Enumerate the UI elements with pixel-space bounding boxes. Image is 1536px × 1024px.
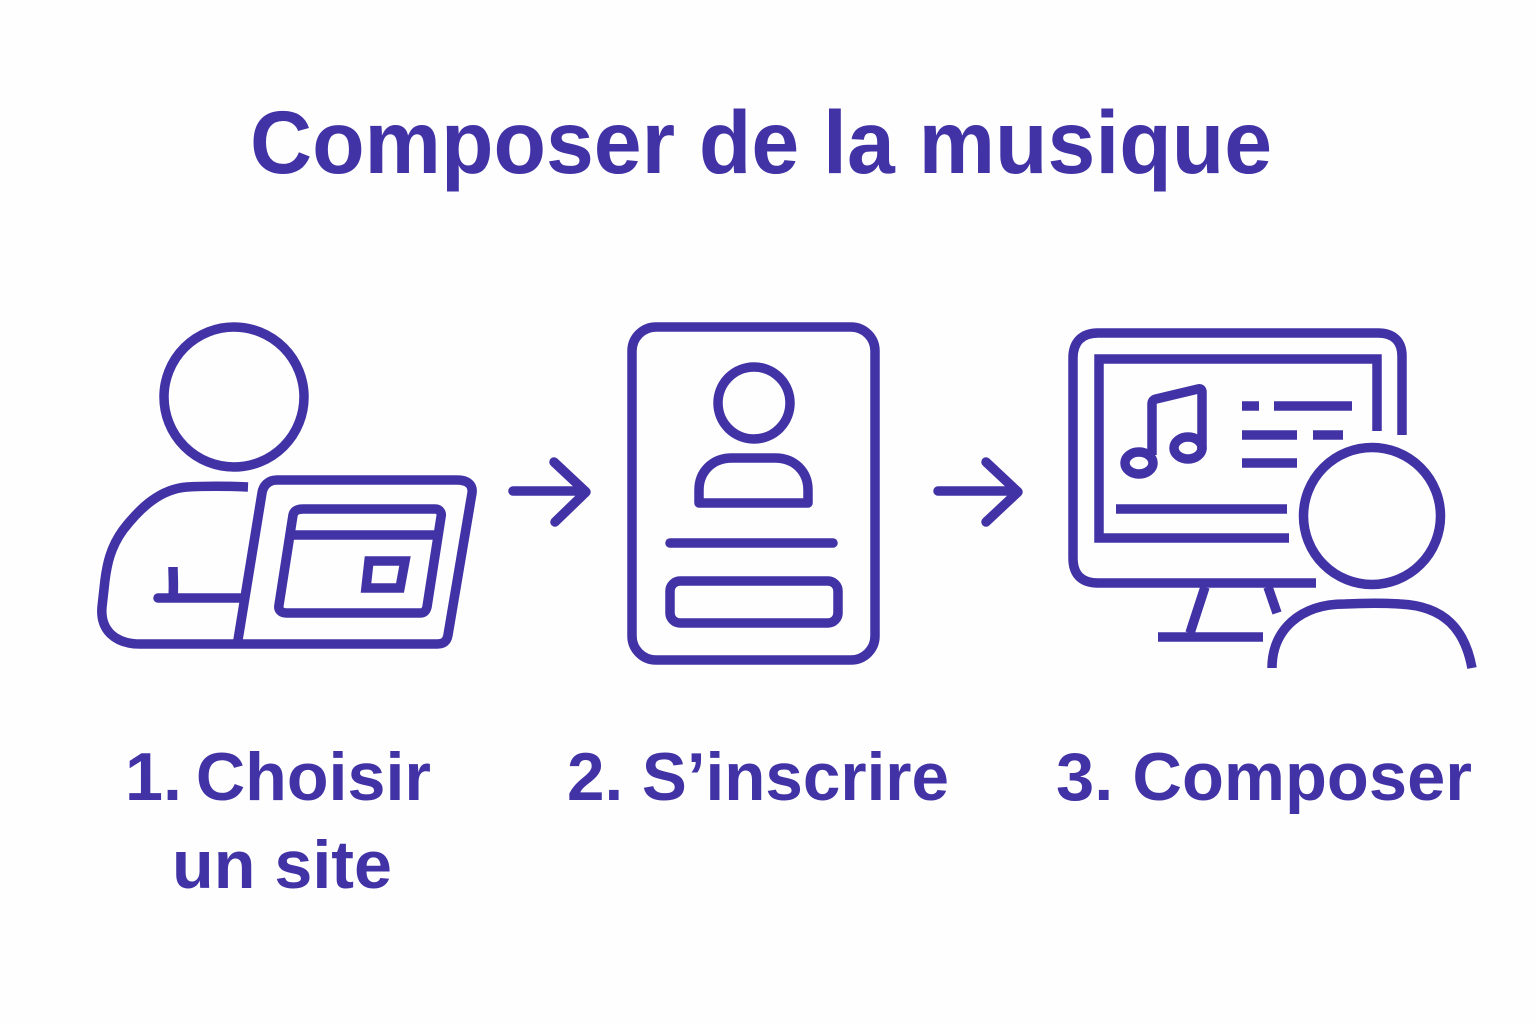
label: step 3: 3. Composer: [1056, 739, 1472, 815]
label: step 1: un site: [172, 827, 392, 903]
icon: person with laptop: [102, 327, 472, 644]
icon: composer at monitor: [1073, 333, 1472, 668]
arrow: step 2 to 3: [938, 462, 1018, 522]
title: Composer de la musique: [250, 92, 1272, 192]
icon: music note: [1125, 389, 1202, 474]
label: step 2: 2. S’inscrire: [567, 739, 949, 815]
label: step 1: 1. Choisir: [125, 739, 431, 815]
icon: registration form: [632, 327, 875, 660]
arrow: step 1 to 2: [513, 462, 586, 522]
label: step 1: [125, 739, 431, 903]
